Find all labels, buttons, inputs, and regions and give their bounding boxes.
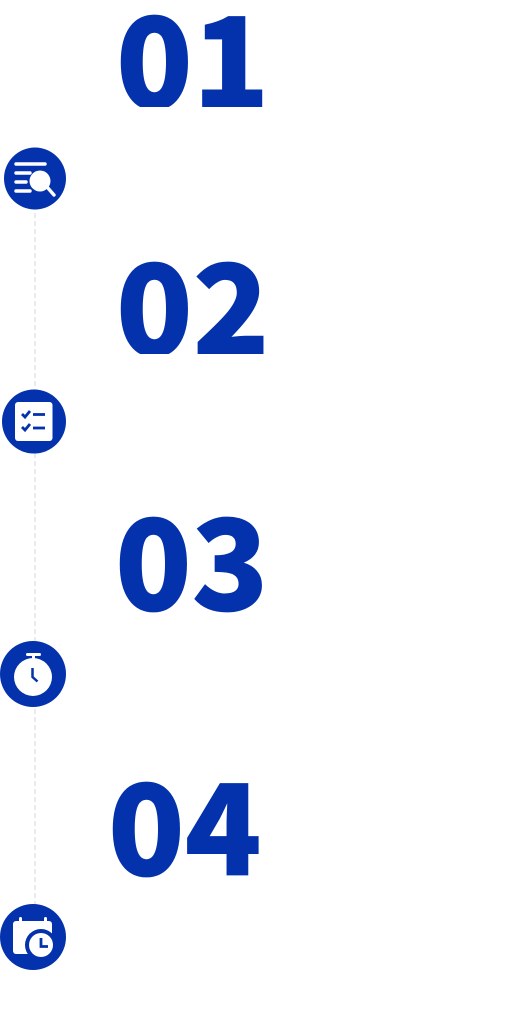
icon: search list (4, 148, 66, 210)
icon: calendar clock (0, 904, 66, 970)
icon: stopwatch (0, 641, 66, 707)
icon: checklist (2, 390, 66, 454)
